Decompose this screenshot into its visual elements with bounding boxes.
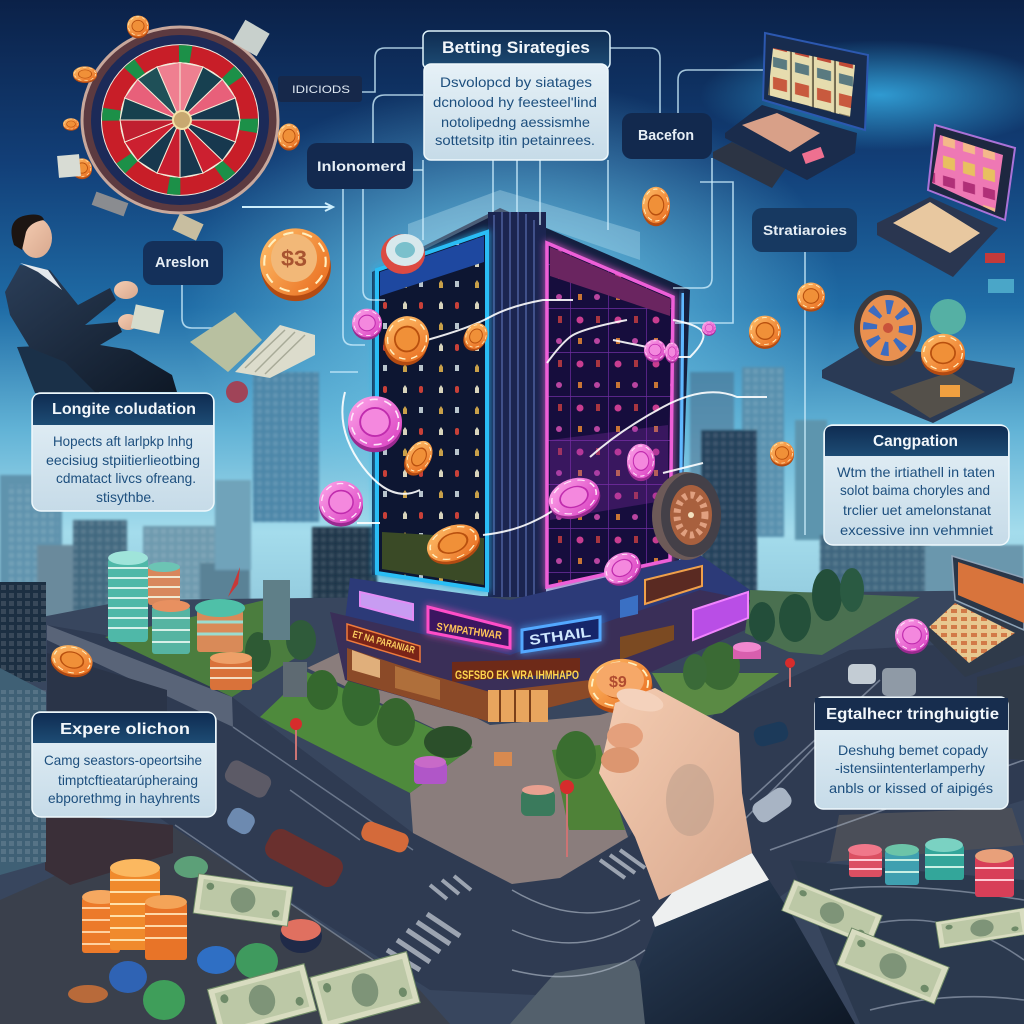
fingers xyxy=(601,684,666,773)
chip xyxy=(921,334,965,375)
arrow from wheel xyxy=(242,203,333,211)
right screen header xyxy=(550,247,671,316)
lawn: small xyxy=(552,745,625,830)
body xyxy=(929,603,1024,677)
chip: red marker xyxy=(226,381,248,403)
base xyxy=(877,197,998,277)
chip xyxy=(585,655,656,717)
palm xyxy=(599,688,752,900)
sign lilac xyxy=(360,592,413,620)
lawn: left xyxy=(105,600,300,697)
lid xyxy=(763,33,868,130)
rooftop detail xyxy=(408,190,640,260)
right screen highlight band xyxy=(550,425,668,520)
sign small blue xyxy=(620,595,638,618)
heading: Betting Sirategies xyxy=(442,38,590,57)
slot machine top right xyxy=(713,33,868,188)
sign purple xyxy=(693,592,748,640)
flag xyxy=(228,567,240,597)
base xyxy=(822,343,1015,423)
left screen xyxy=(377,232,487,590)
left screen header xyxy=(380,236,484,296)
screen xyxy=(768,48,855,117)
hand holding chip xyxy=(585,655,855,1024)
ground and roads xyxy=(0,590,1024,1024)
lid xyxy=(952,556,1024,630)
palm shadow xyxy=(666,764,714,836)
roulette on tower xyxy=(652,472,721,560)
body text xyxy=(837,464,995,538)
label: Bacefon: Bacefon xyxy=(638,127,694,144)
chip stacks bottom right xyxy=(848,838,1014,897)
panel: Egtalhecr xyxy=(815,697,1008,809)
body text: trclier uet amelonstanat xyxy=(843,502,991,518)
lid xyxy=(928,125,1015,220)
central glow xyxy=(180,80,840,520)
small red item xyxy=(985,253,1005,263)
reels on base xyxy=(893,202,980,253)
lawn: right xyxy=(652,673,779,720)
floating items around wheel xyxy=(57,15,300,241)
outer rim xyxy=(82,27,278,213)
shirt cuff xyxy=(652,853,769,927)
body text: solot baima choryles and xyxy=(840,482,990,498)
shirt xyxy=(20,263,62,290)
small pink stack xyxy=(733,642,761,659)
sign magenta text: SYMPATHWAR xyxy=(436,621,503,642)
screen xyxy=(958,562,1024,623)
body text: anbls or kissed of aipigés xyxy=(829,780,993,796)
body text: -istensiintenterlamperhy xyxy=(835,760,985,776)
teal globe xyxy=(930,299,966,335)
suit sleeve xyxy=(639,880,855,1024)
base xyxy=(725,105,857,180)
floating chip: teal and red xyxy=(381,234,425,274)
body text: Dsvolopcd by siatages xyxy=(440,74,592,90)
body text: Camg seastors-opeortsihe xyxy=(44,752,202,768)
roulette console xyxy=(822,290,1015,423)
fanned bills xyxy=(190,312,262,372)
flying chips xyxy=(319,187,929,654)
lawn: centre xyxy=(260,672,473,793)
sign blue xyxy=(522,617,600,652)
big orange chip xyxy=(255,223,336,307)
left screen bottom band xyxy=(382,532,484,585)
hub xyxy=(173,111,191,129)
businessman xyxy=(5,215,177,393)
bottom left buildings xyxy=(0,582,46,875)
central pillar xyxy=(488,212,546,597)
orange stack xyxy=(210,652,252,690)
plaza stacks xyxy=(414,752,555,816)
label: Bacefon xyxy=(622,113,712,159)
marquee centre xyxy=(452,658,580,682)
navy ring xyxy=(91,35,269,205)
body text xyxy=(44,752,202,806)
torso and arms xyxy=(5,265,177,392)
body text: stisythbe. xyxy=(96,489,155,505)
label: Idiciods xyxy=(278,76,362,102)
roulette wheel xyxy=(82,27,278,213)
body text: cdmatact livcs ofreang. xyxy=(56,470,196,486)
body text xyxy=(46,433,200,505)
right screen xyxy=(547,243,673,587)
heading: Longite coludation xyxy=(52,401,196,418)
glow behind top slot machine xyxy=(700,40,1024,150)
sign blue text: STHAIL xyxy=(528,623,592,648)
body text: notolipedng aessismhe xyxy=(441,114,590,130)
cash bottom right xyxy=(782,880,1024,1004)
body text: excessive inn vehmniet xyxy=(840,522,993,538)
chip stacks bottom left xyxy=(68,856,322,1020)
flow lines over the tower xyxy=(427,300,573,340)
body text: Hopects aft larlpkp lnhg xyxy=(53,433,193,449)
money in hand xyxy=(131,304,315,378)
body text: dcnolood hy feesteel'lind xyxy=(433,94,597,110)
marquee centre text: GSFSBO EK WRA IHMHAPO xyxy=(455,668,579,682)
heading: Expere olichon xyxy=(60,721,190,738)
marquee left xyxy=(347,624,420,662)
chip: $9 xyxy=(609,674,627,691)
chip stacks left xyxy=(47,551,307,697)
hand low xyxy=(118,314,138,330)
body text xyxy=(433,74,597,148)
podium lower xyxy=(330,590,750,722)
chair xyxy=(17,345,100,393)
screen xyxy=(932,135,1003,212)
body text: eecisiug stpiitierlieotbing xyxy=(46,452,200,468)
body text: timptcftieatarúpheraing xyxy=(58,772,198,788)
sign magenta xyxy=(428,607,510,648)
number ring xyxy=(101,44,259,196)
right side neon strip xyxy=(680,293,683,560)
glow keys xyxy=(890,372,985,418)
panel: Expere xyxy=(32,712,216,817)
panel: Cangpation xyxy=(824,425,1009,545)
small blue item xyxy=(988,279,1014,293)
head xyxy=(20,218,52,258)
body text: Wtm the irtiathell in taten xyxy=(837,464,995,480)
storefront xyxy=(347,648,600,722)
pink button xyxy=(802,147,824,164)
teal stack xyxy=(108,551,148,642)
podium xyxy=(330,555,750,722)
marquee left text: ET NA PARANIAR xyxy=(351,629,416,657)
slot machine pink xyxy=(877,125,1015,293)
lawn: far right xyxy=(745,590,920,655)
sign orange xyxy=(645,566,702,604)
hair xyxy=(11,215,44,250)
marquee right xyxy=(620,625,674,660)
heading: Cangpation xyxy=(873,433,958,450)
reels on base xyxy=(742,113,820,152)
label: Areslon: Areslon xyxy=(155,254,209,271)
tower body xyxy=(372,208,690,575)
kiosk xyxy=(283,662,307,697)
wheel xyxy=(854,290,922,366)
connector lines xyxy=(182,48,805,535)
road signs xyxy=(290,658,795,857)
label: Areslon xyxy=(143,241,223,285)
small note xyxy=(131,304,164,334)
small tower xyxy=(263,580,290,640)
body text: ebporethmg in hayhrents xyxy=(48,790,200,806)
label: Inlonomerd: Inlonomerd xyxy=(317,158,406,174)
keyboard xyxy=(929,603,1015,663)
orange floating chip xyxy=(47,641,96,682)
body text xyxy=(829,742,993,796)
big orange chip: $3 xyxy=(281,246,307,271)
panel: Longite xyxy=(32,393,214,511)
label: Inlonomerd xyxy=(307,143,413,189)
label: Stratiaroies: Stratiaroies xyxy=(763,222,847,238)
building lower right xyxy=(977,665,1024,760)
podium upper xyxy=(345,555,750,655)
panel: Betting Strategies xyxy=(423,31,610,160)
casino tower xyxy=(372,190,690,597)
trees xyxy=(245,568,864,779)
skyline xyxy=(0,367,1024,663)
orange and teal stack xyxy=(148,562,190,654)
label: Stratiaroies xyxy=(752,208,857,252)
label: Idiciods: IDICIODS xyxy=(292,84,350,96)
slot machine lower right xyxy=(929,556,1024,677)
body text: Deshuhg bemet copady xyxy=(838,742,988,758)
hand up xyxy=(114,281,138,299)
side box xyxy=(713,142,786,188)
heading: Egtalhecr tringhuigtie xyxy=(826,706,999,723)
body text: sottetsitp itin petainrees. xyxy=(435,132,595,148)
plaza pavement xyxy=(307,650,650,884)
cash bottom xyxy=(193,874,420,1024)
bill stack xyxy=(235,325,315,378)
sectors xyxy=(120,62,240,178)
cars xyxy=(222,664,916,891)
mixed stack xyxy=(195,599,245,652)
